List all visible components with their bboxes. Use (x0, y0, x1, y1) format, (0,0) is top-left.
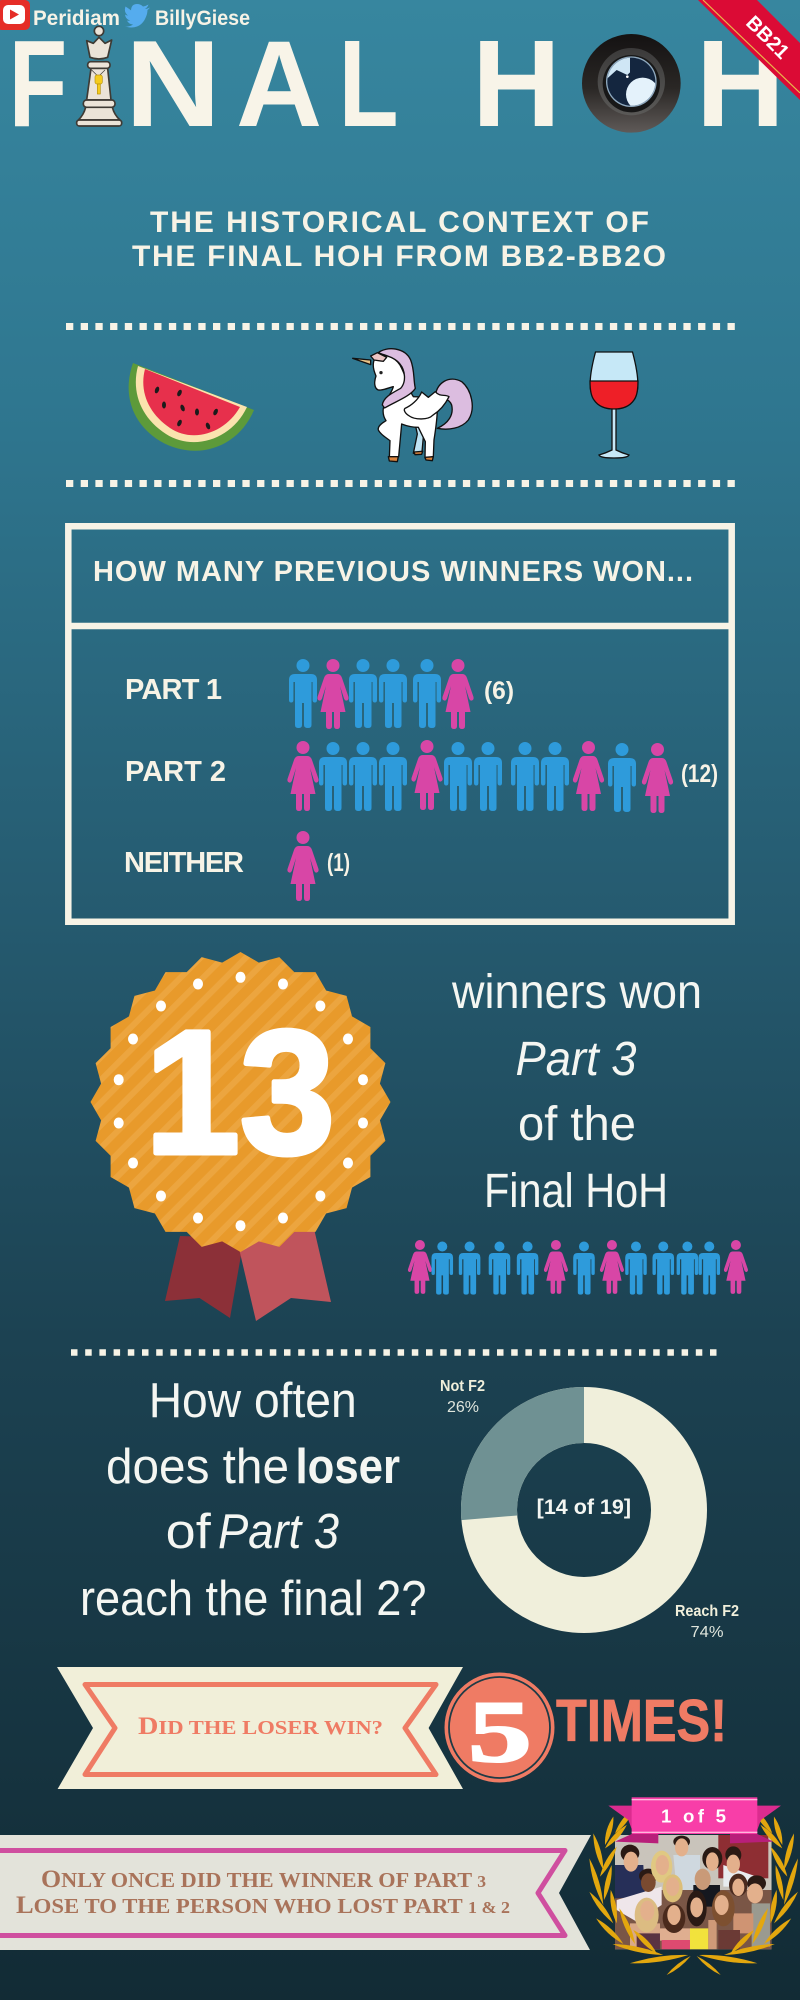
subtitle: THE HISTORICAL CONTEXT OF (150, 206, 649, 239)
icon: wine glass (590, 352, 638, 458)
title letters: N (125, 16, 221, 153)
icon: camera lens (582, 34, 681, 133)
wreath left (587, 1807, 692, 1976)
wreath with cast photo (587, 1797, 800, 1976)
title letters: H (696, 16, 785, 153)
text: Peridiam: Peridiam (33, 7, 120, 30)
icon: unicorn (353, 349, 472, 462)
rosette dots (114, 972, 368, 1231)
text: how often does the loser: Part 3 (218, 1505, 339, 1559)
row: neither: NEITHER (124, 847, 244, 879)
label: not F2 (440, 1378, 485, 1416)
label: not F2: Not F2 (440, 1378, 485, 1395)
banner: only once (0, 1835, 591, 1950)
donut: reach F2 74% (489, 1415, 679, 1605)
title: Final HoH (15, 26, 777, 133)
text: how often does the loser: How often (149, 1374, 357, 1428)
panel heading: HOW MANY PREVIOUS WINNERS WON... (93, 556, 693, 588)
icon: youtube (0, 0, 30, 30)
title letters: L (338, 14, 399, 153)
ribbon tails (165, 1220, 331, 1321)
donut chart: reach final 2 (440, 1378, 739, 1641)
label: reach F2: Reach F2 (675, 1603, 739, 1620)
row: part 1: (6) (484, 677, 514, 705)
row: neither: (1) (327, 849, 350, 877)
title letters (9, 14, 785, 153)
banner: only once: LOSE TO THE PERSON WHO LOST PART 1 & 2 (16, 1892, 510, 1919)
banner: did the loser win (57, 1667, 463, 1789)
subtitle: THE FINAL HOH FROM BB2-BB2O (132, 240, 666, 273)
pink banner: 1 of 5: 1 of 5 (661, 1805, 726, 1826)
circle with 5 (444, 1672, 554, 1782)
label: reach F2: 74% (690, 1624, 724, 1641)
pink banner: 1 of 5 (608, 1797, 781, 1843)
donut: not F2 26% (461, 1387, 584, 1520)
text: how often does the loser: loser (296, 1440, 400, 1494)
panel frame (68, 526, 732, 922)
text: winners won part 3: winners won (451, 966, 702, 1019)
rosette (85, 945, 397, 1259)
text: winners won part 3: Final HoH (484, 1165, 668, 1218)
cast photo (615, 1835, 772, 1949)
banner: did the loser win: DID THE LOSER WIN? (138, 1713, 383, 1740)
row: part 1 (125, 659, 514, 729)
badge: 13 winners (85, 945, 397, 1321)
row: part 2: (12) (681, 760, 718, 788)
divider middle (66, 480, 735, 487)
corner ribbon: BB21: BB21 (741, 12, 793, 64)
wreath right (696, 1807, 800, 1976)
divider top (66, 323, 735, 330)
text: winners won part 3 (451, 966, 702, 1218)
text: winners won part 3: Part 3 (516, 1033, 637, 1086)
text: times: TIMES! (556, 1688, 727, 1754)
text: how often does the loser: does the (106, 1440, 289, 1494)
row: part 1: PART 1 (125, 674, 222, 706)
pictogram: 13 part 3 winners (408, 1240, 748, 1295)
number 13: 13 (145, 994, 335, 1191)
text: BillyGiese: BillyGiese (155, 7, 250, 30)
row: part 2 (125, 740, 718, 813)
icon: chess queen with key (77, 26, 122, 126)
donut centre label: [14 of 19] (537, 1496, 631, 1519)
title letters: A (236, 14, 322, 152)
text: how often does the loser: reach the final 2? (80, 1572, 426, 1626)
icon: twitter bird (125, 4, 150, 27)
panel: previous winners (68, 526, 732, 922)
social handles (0, 0, 250, 30)
corner ribbon: BB21 (698, 0, 800, 100)
text: how often does the loser (80, 1374, 426, 1626)
badge: 5 times (444, 1672, 727, 1782)
label: not F2: 26% (447, 1399, 479, 1416)
label: reach F2 (675, 1603, 739, 1641)
row: neither (124, 831, 350, 901)
icon: watermelon (129, 363, 254, 451)
divider lower (71, 1349, 718, 1356)
text: how often does the loser: of (166, 1505, 211, 1559)
banner: only once: ONLY ONCE DID THE WINNER OF PART 3 (41, 1866, 486, 1893)
circle with 5: 5 (468, 1682, 532, 1780)
row: part 2: PART 2 (125, 756, 226, 788)
title letters: H (472, 16, 561, 153)
text: winners won part 3: of the (518, 1098, 636, 1151)
title letters: F (9, 16, 67, 153)
subtitle (132, 206, 666, 273)
